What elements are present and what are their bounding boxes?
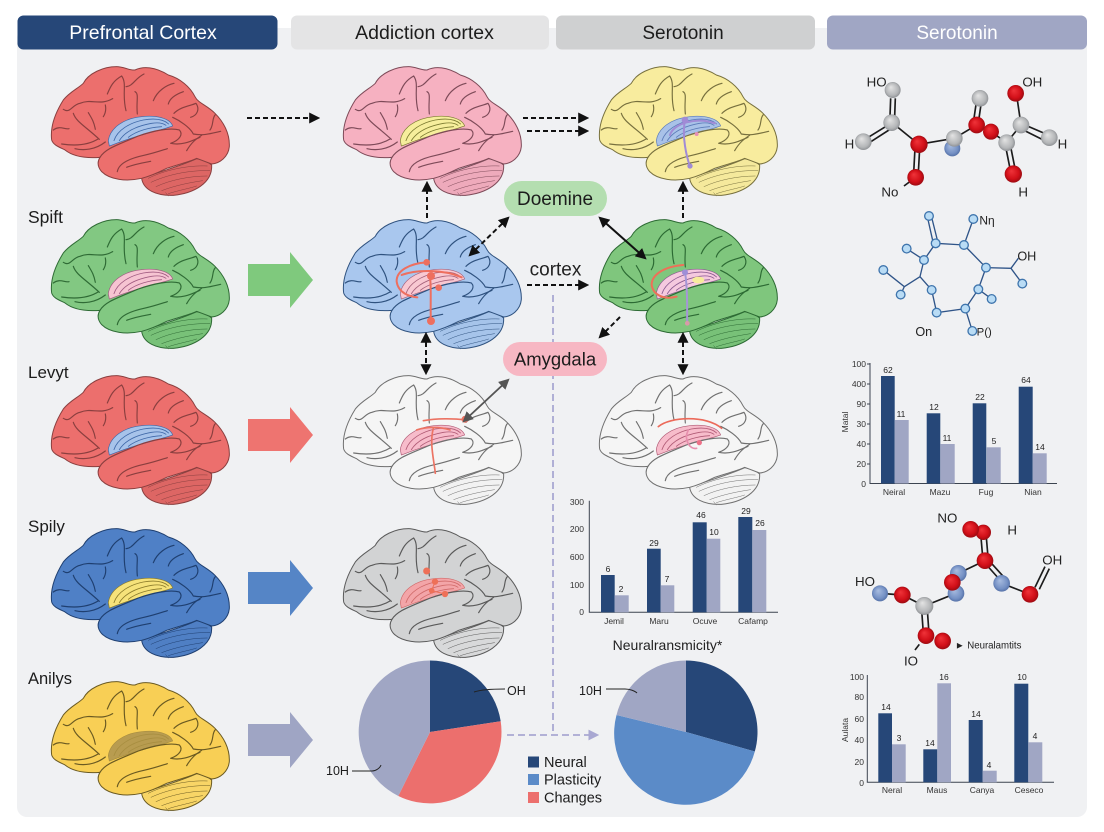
bar chart: center: 0 — [579, 607, 584, 617]
brain: gray with red nodes — [343, 529, 521, 658]
label: Spily: Spily — [28, 517, 65, 536]
molecule: blue ring — [879, 212, 1036, 339]
molecule: ball and stick one: H — [1018, 185, 1028, 200]
pill: Doemine: Doemine — [517, 189, 593, 210]
molecule: ball and stick two: NO — [937, 511, 957, 526]
brain: yellow with blue insula — [599, 67, 777, 196]
bar chart: top right: 12 — [929, 402, 939, 412]
legend — [528, 755, 602, 806]
bar chart: center: 46 — [696, 510, 706, 520]
bar chart: top right: 30 — [857, 419, 866, 429]
legend: Plasticity — [544, 772, 602, 788]
bar chart: center: Cafamp — [738, 616, 768, 626]
molecule: ball and stick one: OH — [1022, 75, 1042, 90]
molecule: ball and stick two — [855, 511, 1062, 669]
arrow: Doemine to green brain — [600, 218, 645, 258]
bar chart: center — [570, 497, 778, 626]
header: Prefrontal Cortex — [18, 16, 278, 50]
brain: red with blue insula — [51, 67, 229, 196]
bar chart: bottom right: Maus — [927, 785, 947, 795]
chart title: Neuralransmicity: Neuralransmicity* — [613, 637, 723, 653]
bar chart: top right: 90 — [857, 399, 866, 409]
header: Serotonin (middle) — [556, 16, 815, 50]
arrow: up to yellow brain — [682, 183, 684, 218]
molecule: ball and stick one: H — [1058, 136, 1067, 151]
bar chart: center: 2 — [619, 584, 624, 594]
arrow: green block — [248, 252, 313, 308]
arrow: dashed cortex to green brain — [527, 284, 587, 286]
bar chart: center: 6 — [606, 564, 611, 574]
bar chart: top right: 62 — [883, 365, 893, 375]
bar chart: bottom right: Neral — [882, 785, 902, 795]
brain: green with pathways — [599, 220, 777, 349]
bar chart: center: 29 — [741, 506, 751, 516]
label: Anilys: Anilys — [28, 670, 72, 688]
bar chart: top right: Neiral — [883, 487, 905, 497]
bar chart: top right: 40 — [857, 439, 866, 449]
arrow: green brain to white brain — [682, 334, 684, 373]
pill: Amygdala — [503, 342, 607, 376]
label: Levyt: Levyt — [28, 363, 69, 382]
arrow: white brain to Amygdala — [464, 380, 508, 421]
bar chart: center: 29 — [649, 538, 659, 548]
arrows: double dashed to yellow brain — [523, 118, 587, 131]
bar chart: top right: 5 — [992, 436, 997, 446]
label: Spift: Spift — [28, 207, 63, 227]
bar chart: bottom right: Ceseco — [1015, 785, 1044, 795]
pie chart: left — [326, 660, 526, 803]
bar chart: bottom right: 16 — [939, 672, 949, 682]
bar chart: bottom right: 4 — [987, 760, 992, 770]
header: Serotonin (middle): Serotonin — [642, 23, 724, 44]
brain: red with blue insula, row three — [51, 376, 229, 505]
bar chart: bottom right: 20 — [855, 757, 864, 767]
bar chart: bottom right: 10 — [1017, 672, 1027, 682]
arrow: lilac block — [248, 712, 313, 768]
brain: green with pink insula — [51, 220, 229, 349]
arrow: green brain to Amygdala — [600, 317, 620, 337]
bar chart: top right: Nian — [1024, 487, 1042, 497]
molecule: blue ring: P() — [977, 326, 992, 338]
bar chart: center: Maru — [649, 616, 669, 626]
legend: Changes — [544, 790, 602, 806]
bar chart: bottom right: 60 — [855, 714, 864, 724]
bar chart: bottom right: 40 — [855, 735, 864, 745]
bar chart: top right: 0 — [861, 479, 866, 489]
bar chart: bottom right: 14 — [881, 702, 891, 712]
brain: white with arc pathway — [599, 376, 777, 505]
bar chart: bottom right: 100 — [850, 672, 864, 682]
bar chart: top right: 14 — [1035, 442, 1045, 452]
molecule: ball and stick two: H — [1007, 522, 1017, 537]
bar chart: top right: 400 — [852, 379, 866, 389]
molecule: ball and stick two: HO — [855, 574, 875, 589]
bar chart: center: 26 — [755, 518, 765, 528]
bar chart: center: 600 — [570, 552, 584, 562]
bar chart: bottom right: 80 — [855, 692, 864, 702]
legend: Neural — [544, 755, 587, 771]
pie chart: right — [579, 660, 758, 805]
brain: white with red pathway — [343, 376, 521, 505]
bar chart: top right: Fug — [979, 487, 994, 497]
bar chart: bottom right — [840, 672, 1054, 795]
bar chart: bottom right: 0 — [859, 778, 864, 788]
pie chart: right: 10H — [579, 684, 602, 698]
bar chart: bottom right: Canya — [970, 785, 995, 795]
brain: yellow with brown insula — [51, 682, 229, 811]
label: cortex: cortex — [530, 260, 582, 280]
molecule: blue ring: OH — [1017, 249, 1036, 263]
molecule: ball and stick two: ► Neuralamtits — [955, 641, 1022, 652]
molecule: blue ring: Nη — [979, 214, 995, 228]
bar chart: top right: Mazu — [930, 487, 951, 497]
header: Addiction cortex: Addiction cortex — [355, 22, 494, 44]
arrow: dashed to pink brain — [247, 117, 318, 119]
brain: blue with neural pathways — [343, 220, 521, 349]
bar chart: top right: 11 — [943, 433, 952, 443]
bar chart: top right: 20 — [857, 459, 866, 469]
bar chart: center: Ocuve — [693, 616, 718, 626]
bar chart: top right: 22 — [975, 392, 985, 402]
header: Serotonin (right) — [827, 16, 1087, 50]
arrow: red block — [248, 407, 313, 463]
pill: Amygdala: Amygdala — [514, 348, 597, 370]
header: Addiction cortex — [291, 16, 549, 50]
bar chart: bottom right: 3 — [897, 733, 902, 743]
bar chart: top right: 100 — [852, 359, 866, 369]
bar chart: bottom right: Aulata — [840, 718, 850, 742]
bar chart: center: 10 — [709, 527, 719, 537]
pie chart: left: OH — [507, 684, 526, 698]
bar chart: top right — [840, 359, 1057, 497]
bar chart: bottom right: 4 — [1033, 731, 1038, 741]
bar chart: center: 100 — [570, 580, 584, 590]
arrow: blue block — [248, 560, 313, 616]
molecule: blue ring: On — [915, 325, 932, 339]
brain: pink with yellow insula — [343, 67, 521, 196]
bar chart: center: 300 — [570, 497, 584, 507]
arrow: up to pink brain — [426, 183, 428, 218]
molecule: ball and stick two: OH — [1042, 553, 1062, 568]
bar chart: bottom right: 14 — [971, 709, 981, 719]
arrow: blue brain to white brain — [425, 334, 427, 373]
bar chart: bottom right: 14 — [925, 738, 935, 748]
bar chart: top right: 64 — [1021, 375, 1031, 385]
arrow: lilac connector — [507, 295, 597, 735]
arrow: blue brain to Doemine — [470, 218, 508, 255]
bar chart: center: 7 — [665, 574, 670, 584]
pill: Doemine — [504, 181, 607, 216]
molecule: ball and stick one — [845, 75, 1067, 200]
molecule: ball and stick two: IO — [904, 654, 918, 669]
molecule: ball and stick one: H — [845, 136, 854, 151]
bar chart: center: Jemil — [604, 616, 624, 626]
bar chart: center: 200 — [570, 524, 584, 534]
bar chart: top right: Matal — [840, 412, 850, 432]
header: Prefrontal Cortex: Prefrontal Cortex — [69, 22, 217, 44]
molecule: ball and stick one: No — [881, 185, 898, 200]
bar chart: top right: 11 — [897, 409, 906, 419]
brain: blue with yellow insula — [51, 529, 229, 658]
pie chart: left: 10H — [326, 764, 349, 778]
molecule: ball and stick one: HO — [867, 75, 887, 90]
header: Serotonin (right): Serotonin — [916, 23, 998, 44]
